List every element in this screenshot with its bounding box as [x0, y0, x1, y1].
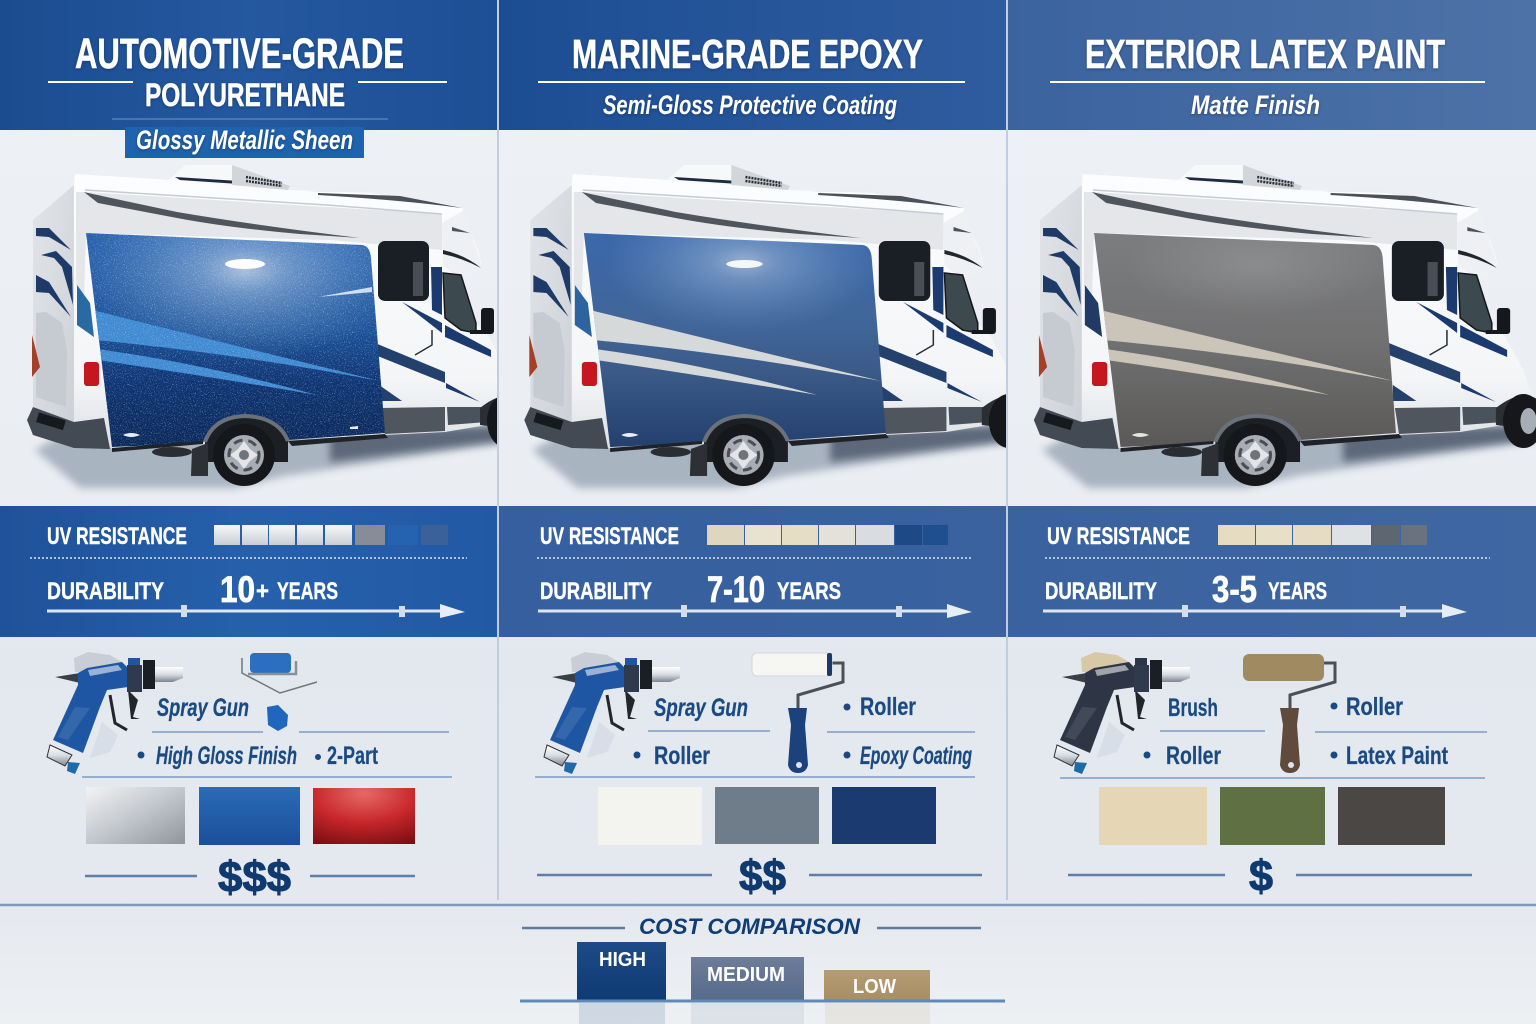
bar: medium: MEDIUM — [707, 964, 785, 986]
title — [1050, 31, 1485, 120]
paint area — [86, 233, 385, 447]
icon: roller — [1243, 654, 1335, 773]
UV resistance — [1045, 523, 1490, 558]
title: POLYURETHANE — [145, 77, 345, 113]
title — [538, 31, 965, 120]
cost: medium: $$ — [739, 852, 786, 901]
rating bar — [1218, 525, 1427, 545]
RV with semi-gloss blue test panel — [524, 165, 1029, 488]
panel: cost comparison — [520, 914, 1005, 1024]
bar: low — [824, 970, 930, 1001]
panel: automotive-grade polyurethane — [0, 0, 527, 902]
heading: COST COMPARISON — [639, 914, 861, 939]
durability: DURABILITY — [540, 578, 652, 605]
icon: roller — [752, 653, 843, 773]
RV with matte grey test panel — [1034, 165, 1536, 488]
colour swatches — [1099, 787, 1445, 845]
tools: 2-Part — [327, 742, 378, 770]
tools — [1054, 652, 1487, 778]
durability: YEARS — [277, 578, 338, 605]
stats band — [499, 506, 1006, 637]
tools: Roller — [1166, 742, 1221, 770]
paint area — [1094, 215, 1396, 447]
rating bar — [707, 525, 948, 545]
UV resistance: UV RESISTANCE — [47, 523, 187, 550]
stats band — [0, 506, 497, 637]
colour swatches — [86, 787, 415, 845]
panel: exterior latex paint — [1008, 0, 1536, 901]
durability — [1043, 569, 1467, 618]
icon: spray gun — [47, 652, 183, 774]
cost: high: $$$ — [218, 853, 291, 902]
tools: Brush — [1168, 694, 1218, 722]
tools — [47, 652, 452, 777]
durability: DURABILITY — [47, 578, 164, 605]
durability: 3-5 — [1212, 569, 1257, 610]
finish label: Glossy Metallic Sheen — [136, 125, 353, 155]
durability — [538, 569, 972, 618]
RV with metallic blue test panel — [27, 165, 527, 488]
tools — [535, 652, 975, 777]
durability: DURABILITY — [1045, 578, 1157, 605]
tools: Roller — [1346, 693, 1403, 721]
title: Semi-Gloss Protective Coating — [603, 90, 897, 120]
tools: Spray Gun — [157, 694, 249, 722]
bar: high: HIGH — [599, 949, 646, 971]
tools: High Gloss Finish — [156, 742, 297, 770]
UV resistance: UV RESISTANCE — [1047, 523, 1190, 550]
colour swatches — [598, 787, 936, 845]
title: Matte Finish — [1191, 90, 1320, 120]
rating bar — [214, 525, 448, 545]
bar: low: LOW — [853, 976, 896, 998]
durability: 7-10 — [707, 569, 765, 610]
icon: paint applicator — [242, 653, 317, 693]
tools: Epoxy Coating — [860, 742, 972, 770]
icon: spray gun — [1054, 652, 1190, 774]
title: MARINE-GRADE EPOXY — [572, 31, 923, 77]
durability: 10 — [220, 569, 255, 610]
paint area — [584, 233, 886, 447]
header band — [1008, 0, 1536, 130]
durability: YEARS — [1268, 578, 1327, 605]
durability — [47, 569, 465, 618]
panel: marine-grade epoxy — [499, 0, 1029, 901]
tools: Roller — [860, 693, 916, 721]
durability: + — [256, 578, 269, 605]
cost: low: $ — [1249, 852, 1273, 901]
icon: spray gun — [544, 652, 680, 774]
icon: blue paint blob — [267, 705, 288, 731]
tools: Latex Paint — [1346, 742, 1449, 770]
UV resistance: UV RESISTANCE — [540, 523, 679, 550]
header band — [499, 0, 1006, 130]
tools: Spray Gun — [654, 694, 748, 722]
UV resistance — [537, 523, 972, 558]
stats band — [1008, 506, 1536, 637]
bar: medium — [691, 957, 804, 1001]
title: AUTOMOTIVE-GRADE — [75, 30, 404, 78]
bar: high — [577, 942, 666, 1001]
durability: YEARS — [777, 578, 841, 605]
header band — [0, 0, 497, 130]
UV resistance — [30, 523, 467, 558]
title — [48, 30, 447, 119]
tools: Roller — [654, 742, 710, 770]
